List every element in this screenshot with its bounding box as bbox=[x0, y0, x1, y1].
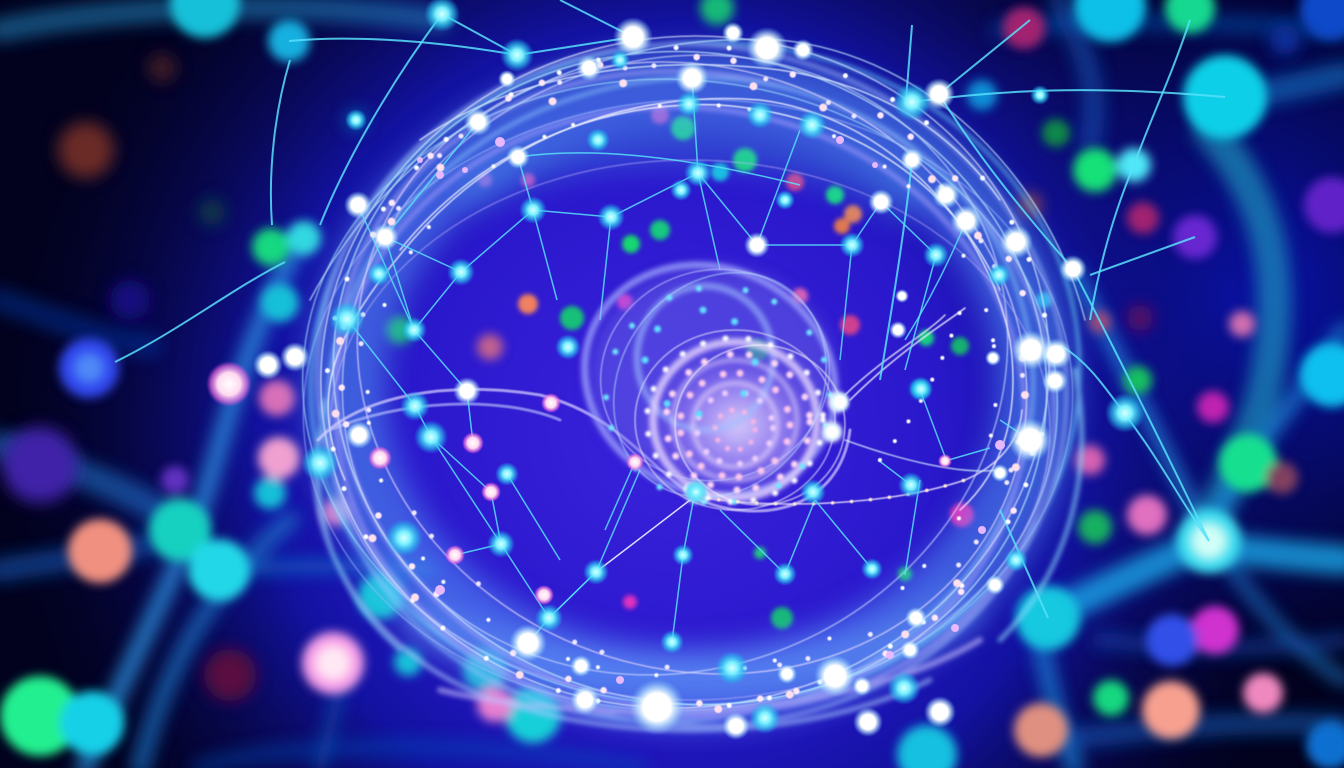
ring haze bbox=[347, 88, 1037, 688]
network nodes bbox=[206, 0, 1145, 740]
nodes: pink bbox=[368, 393, 952, 605]
swirl strands bbox=[547, 224, 873, 536]
inner swirl bbox=[547, 224, 873, 539]
ring dots bbox=[274, 0, 1109, 768]
swirl fine strands bbox=[570, 231, 870, 539]
nodes: cyan bbox=[301, 0, 1145, 734]
nodes: white bbox=[253, 17, 1087, 740]
outer ring strands bbox=[243, 0, 1123, 768]
inner mesh lines bbox=[347, 78, 1030, 643]
node: large pink-white bbox=[206, 361, 252, 407]
swirl dots bbox=[606, 287, 830, 503]
ring strands: fine bright bbox=[243, 0, 1120, 768]
outer lines bbox=[115, 0, 1225, 618]
nodes: violet small bbox=[417, 136, 1005, 684]
bokeh: coloured specks inside sphere bbox=[478, 106, 1052, 629]
network connection lines bbox=[115, 0, 1225, 643]
swirl glow core bbox=[590, 267, 834, 507]
swirl bright highlights bbox=[685, 392, 848, 503]
ring strands: soft lilac and cyan bbox=[258, 0, 1123, 768]
